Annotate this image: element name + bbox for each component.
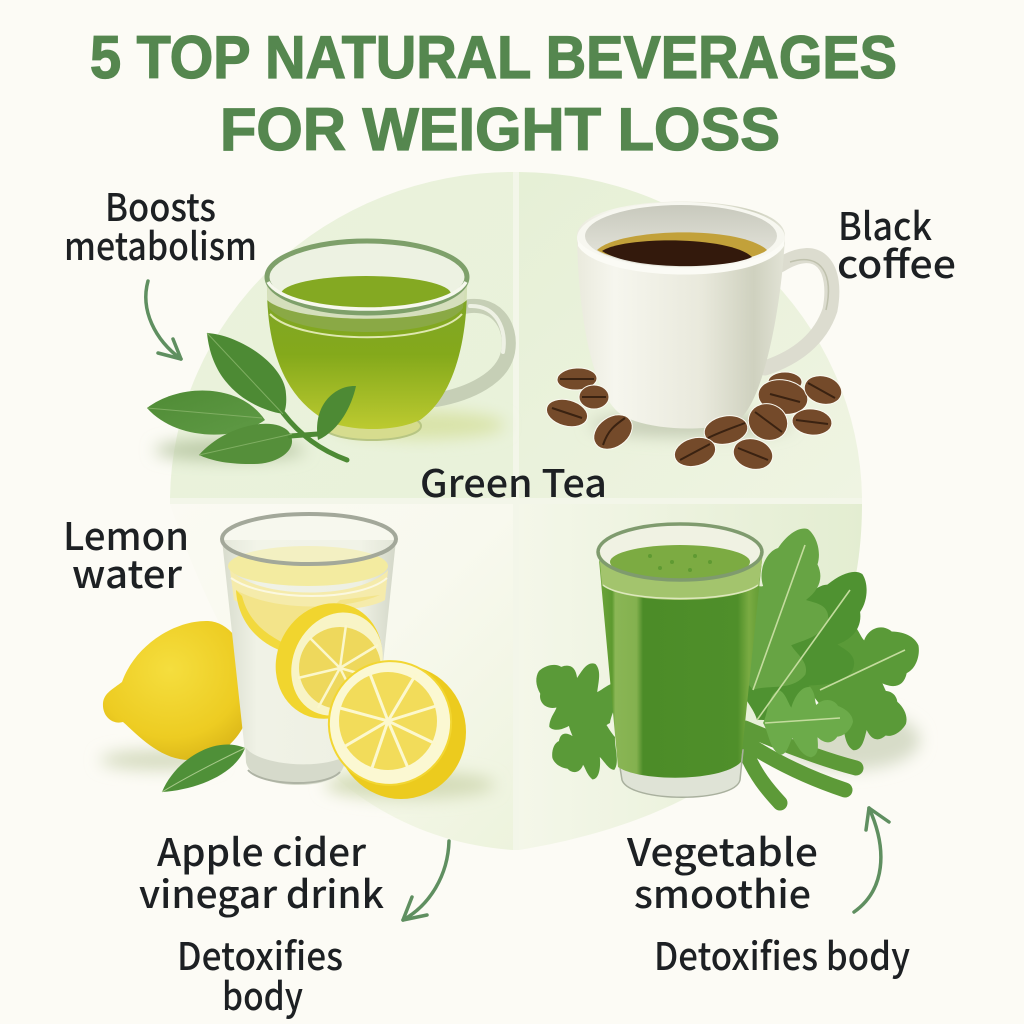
arrow: toward vegetable smoothie — [854, 808, 889, 912]
title: FOR WEIGHT LOSS — [220, 96, 780, 163]
coffee cup handle — [765, 256, 832, 368]
coffee surface — [602, 240, 752, 266]
label: black coffee — [837, 196, 956, 289]
label: detoxifies body (left) — [177, 926, 343, 1021]
label: boosts metabolism: Boosts — [105, 177, 216, 232]
tea cup foot — [323, 412, 421, 440]
arrow: toward apple cider vinegar drink — [403, 841, 449, 920]
greens: stems — [745, 728, 856, 803]
illustration: black coffee cup with beans — [543, 202, 845, 474]
tea cup rim — [267, 241, 467, 313]
greens: left leaves — [516, 640, 633, 790]
label: detoxifies body (left): body — [222, 966, 303, 1021]
leaf veins — [147, 333, 292, 455]
label: lemon water: water — [72, 544, 182, 599]
tea surface — [281, 276, 451, 312]
smoothie glass top band — [599, 552, 763, 600]
label: lemon water — [63, 506, 189, 599]
illustration: vegetable smoothie with leafy greens — [516, 514, 938, 803]
arrow: boosts metabolism to green tea — [146, 281, 181, 359]
tea sprig stem — [283, 413, 347, 460]
label: detoxifies body (right): Detoxifies body — [654, 926, 910, 981]
tea cup glass wall — [267, 243, 467, 319]
illustration: lemon water glass with lemons — [100, 514, 495, 802]
submerged lemon slice — [236, 590, 380, 652]
tea leaf: bottom — [199, 424, 292, 464]
title — [90, 24, 897, 163]
label: black coffee: coffee — [837, 234, 956, 289]
tea leaf: top — [207, 333, 286, 414]
label: green tea: Green Tea — [420, 453, 607, 508]
title: 5 TOP NATURAL BEVERAGES — [90, 24, 897, 91]
smoothie glass base — [618, 750, 743, 797]
label: boosts metabolism — [64, 177, 257, 271]
label: lemon water: Lemon — [63, 506, 189, 561]
label: apple cider vinegar drink: Apple cider — [157, 822, 366, 877]
greens: leaf midribs — [753, 545, 905, 723]
coffee beans — [543, 367, 845, 474]
tea leaf: small — [317, 386, 356, 440]
smoothie surface — [610, 545, 750, 579]
label: apple cider vinegar drink — [139, 822, 384, 919]
tea leaf: left — [147, 391, 265, 435]
greens: right side leaves — [708, 514, 938, 762]
whole lemon — [103, 621, 252, 760]
label: vegetable smoothie: smoothie — [634, 864, 811, 919]
tea band highlight — [267, 285, 465, 332]
label: apple cider vinegar drink: vinegar drink — [139, 864, 384, 919]
tea cup body — [267, 280, 467, 429]
label: detoxifies body (left): Detoxifies — [177, 926, 343, 981]
tea cup handle — [436, 306, 509, 400]
coffee bean creases — [552, 379, 835, 460]
lemon leaf — [162, 744, 245, 792]
halved lemon — [311, 644, 469, 802]
glass rim — [222, 514, 396, 564]
lemon slice in glass — [257, 586, 401, 736]
water tint — [228, 546, 388, 586]
coffee cup body — [577, 202, 785, 428]
background circle divided into four quadrants — [170, 172, 862, 850]
label: boosts metabolism: metabolism — [64, 216, 257, 271]
coffee cup rim and interior — [577, 202, 785, 274]
smoothie body — [599, 560, 762, 778]
label: vegetable smoothie: Vegetable — [626, 822, 818, 877]
coffee crema — [597, 232, 767, 264]
glass body — [222, 540, 396, 785]
glass base — [246, 748, 350, 785]
smoothie glass rim — [598, 524, 762, 580]
label: vegetable smoothie — [626, 822, 818, 919]
label: black coffee: Black — [838, 196, 932, 251]
illustration: green tea cup with leaves — [147, 241, 509, 464]
